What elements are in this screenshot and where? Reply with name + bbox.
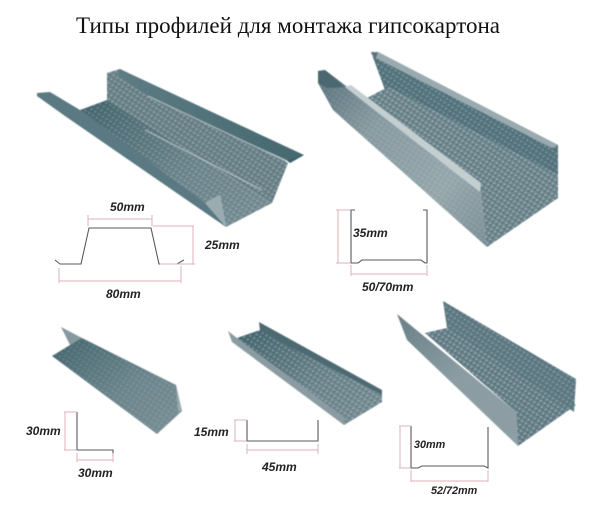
diagram: L section: [77, 412, 113, 456]
label: 50mm: 50mm: [110, 200, 145, 214]
title: Типы профилей для монтажа гипсокартона: [76, 13, 500, 38]
dimension lines: [234, 420, 318, 454]
diagram: C section: [351, 210, 427, 263]
dimension lines: [399, 426, 488, 482]
diagram: hat section: [55, 228, 184, 264]
label: 45mm: 45mm: [261, 460, 297, 474]
label: 52/72mm: 52/72mm: [431, 485, 478, 497]
panel: profile 30x52/72: [397, 301, 576, 497]
photo: hat profile: [37, 69, 304, 227]
dimension lines: [336, 210, 427, 276]
photo: large channel: [397, 301, 576, 446]
photo: tall channel: [318, 52, 558, 247]
label: 30mm left: 30mm: [26, 424, 61, 438]
diagram: C section with lips: [411, 426, 488, 468]
label: 30mm: 30mm: [414, 439, 446, 451]
label: 15mm: 15mm: [194, 425, 229, 439]
panel: profile 15x45: [194, 322, 382, 474]
panel: angle profile 30x30: [26, 327, 182, 480]
label: 30mm bottom: 30mm: [78, 466, 113, 480]
label: 35mm: 35mm: [353, 226, 388, 240]
photo: small channel: [228, 322, 382, 425]
label: 50/70mm: 50/70mm: [362, 280, 414, 294]
label: 25mm: 25mm: [204, 238, 240, 252]
dimension lines: [64, 412, 113, 462]
panel: profile 35x50/70: [318, 52, 558, 294]
label: 80mm: 80mm: [106, 287, 141, 301]
photo: angle: [52, 327, 182, 434]
diagram: U section: [247, 420, 318, 441]
dimension lines: [59, 215, 195, 283]
panel: profile 50x25x80: [37, 69, 304, 301]
